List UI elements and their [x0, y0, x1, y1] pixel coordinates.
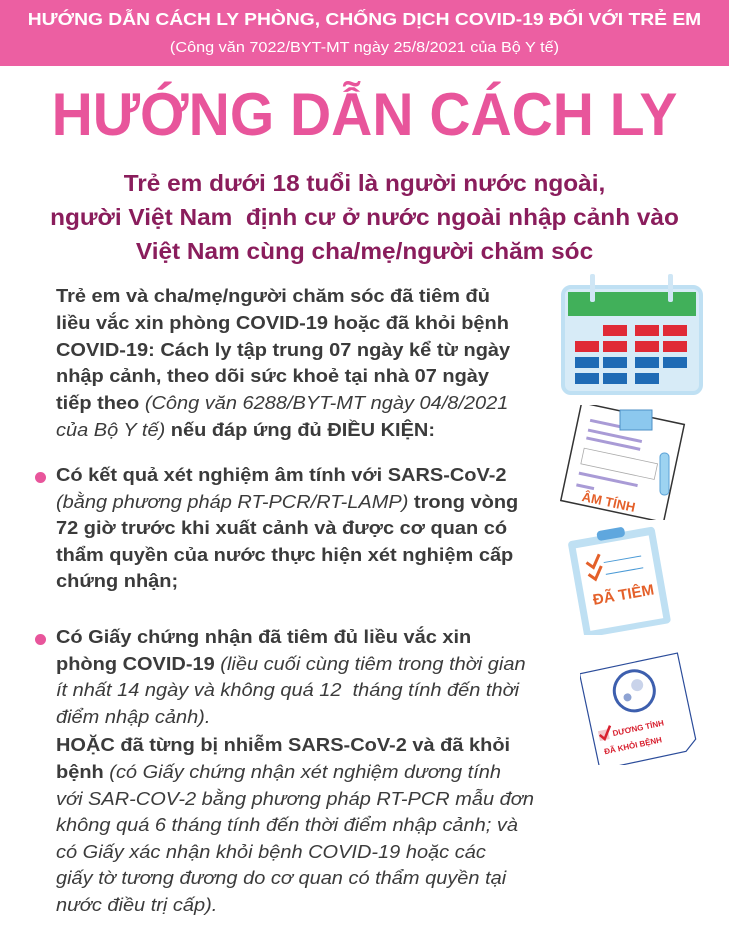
bullet 1: negative test: chứng nhận; — [56, 570, 178, 591]
bullet 2: vaccinated or recovered: không quá 6 tháng tính đến thời điểm nhập cảnh; và — [56, 814, 518, 835]
header band — [0, 0, 729, 66]
bullet 2: vaccinated or recovered: với SAR-COV-2 bằng phương pháp RT-PCR mẫu đơn — [56, 788, 534, 809]
bullet 2: vaccinated or recovered: phòng COVID-19 (liều cuối cùng tiêm trong thời gian — [56, 653, 526, 674]
main title: HƯỚNG DẪN CÁCH LY — [52, 81, 677, 148]
icon: positive recovered document — [580, 652, 696, 765]
icon: negative test document — [560, 405, 686, 520]
subtitle block: Trẻ em dưới 18 tuổi là người nước ngoài, — [124, 170, 605, 196]
bullet 2: vaccinated or recovered: Có Giấy chứng nhận đã tiêm đủ liều vắc xin — [56, 626, 471, 647]
bullet 1: negative test: (bằng phương pháp RT-PCR/RT-LAMP) trong vòng — [56, 491, 518, 512]
bullet 2: vaccinated or recovered: bệnh (có Giấy chứng nhận xét nghiệm dương tính — [56, 761, 501, 782]
intro text: của Bộ Y tế) nếu đáp ứng đủ ĐIỀU KIỆN: — [56, 419, 435, 440]
subtitle block: người Việt Nam định cư ở nước ngoài nhập cảnh vào — [50, 204, 679, 230]
intro text: liều vắc xin phòng COVID-19 hoặc đã khỏi bệnh — [56, 312, 509, 333]
bullet 2: vaccinated or recovered: có Giấy xác nhận khỏi bệnh COVID-19 hoặc các — [56, 841, 486, 862]
icon: calendar — [561, 274, 703, 395]
header title: HƯỚNG DẪN CÁCH LY PHÒNG, CHỐNG DỊCH COVID-19 ĐỐI VỚI TRẺ EM — [28, 9, 701, 29]
icon: vaccinated clipboard — [568, 526, 670, 635]
bullet 1: negative test: Có kết quả xét nghiệm âm tính với SARS-CoV-2 — [56, 464, 507, 485]
bullet 2: vaccinated or recovered: điểm nhập cảnh). — [56, 706, 210, 727]
subtitle block: Việt Nam cùng cha/mẹ/người chăm sóc — [136, 238, 593, 264]
bullet 2: vaccinated or recovered: HOẶC đã từng bị nhiễm SARS-CoV-2 và đã khỏi — [56, 734, 510, 755]
bullet 1: negative test: thẩm quyền của nước thực hiện xét nghiệm cấp — [56, 544, 513, 565]
intro text — [56, 285, 510, 440]
bullet 1: negative test — [35, 464, 518, 591]
bullet 2: vaccinated or recovered: nước điều trị cấp). — [56, 894, 217, 915]
intro text: nhập cảnh, theo dõi sức khoẻ tại nhà 07 ngày — [56, 365, 489, 386]
intro text: Trẻ em và cha/mẹ/người chăm sóc đã tiêm đủ — [56, 285, 490, 306]
intro text: tiếp theo (Công văn 6288/BYT-MT ngày 04/8/2021 — [56, 392, 508, 413]
bullet 1: negative test: 72 giờ trước khi xuất cảnh và được cơ quan có — [56, 517, 507, 538]
icon: negative test document: ÂM TÍNH — [581, 489, 637, 515]
bullet 2: vaccinated or recovered: giấy tờ tương đương do cơ quan có thẩm quyền tại — [56, 867, 506, 888]
bullet 2: vaccinated or recovered — [35, 626, 534, 915]
icon: positive recovered document: ĐÃ KHỎI BỆNH — [603, 735, 663, 756]
bullet 2: vaccinated or recovered: ít nhất 14 ngày và không quá 12 tháng tính đến thời — [56, 679, 519, 700]
header subtitle: (Công văn 7022/BYT-MT ngày 25/8/2021 của Bộ Y tế) — [170, 40, 559, 56]
subtitle block — [50, 170, 679, 264]
intro text: COVID-19: Cách ly tập trung 07 ngày kể từ ngày — [56, 339, 510, 360]
icon: positive recovered document: DƯƠNG TÍNH — [612, 718, 665, 738]
icon: vaccinated clipboard: ĐÃ TIÊM — [591, 580, 655, 609]
